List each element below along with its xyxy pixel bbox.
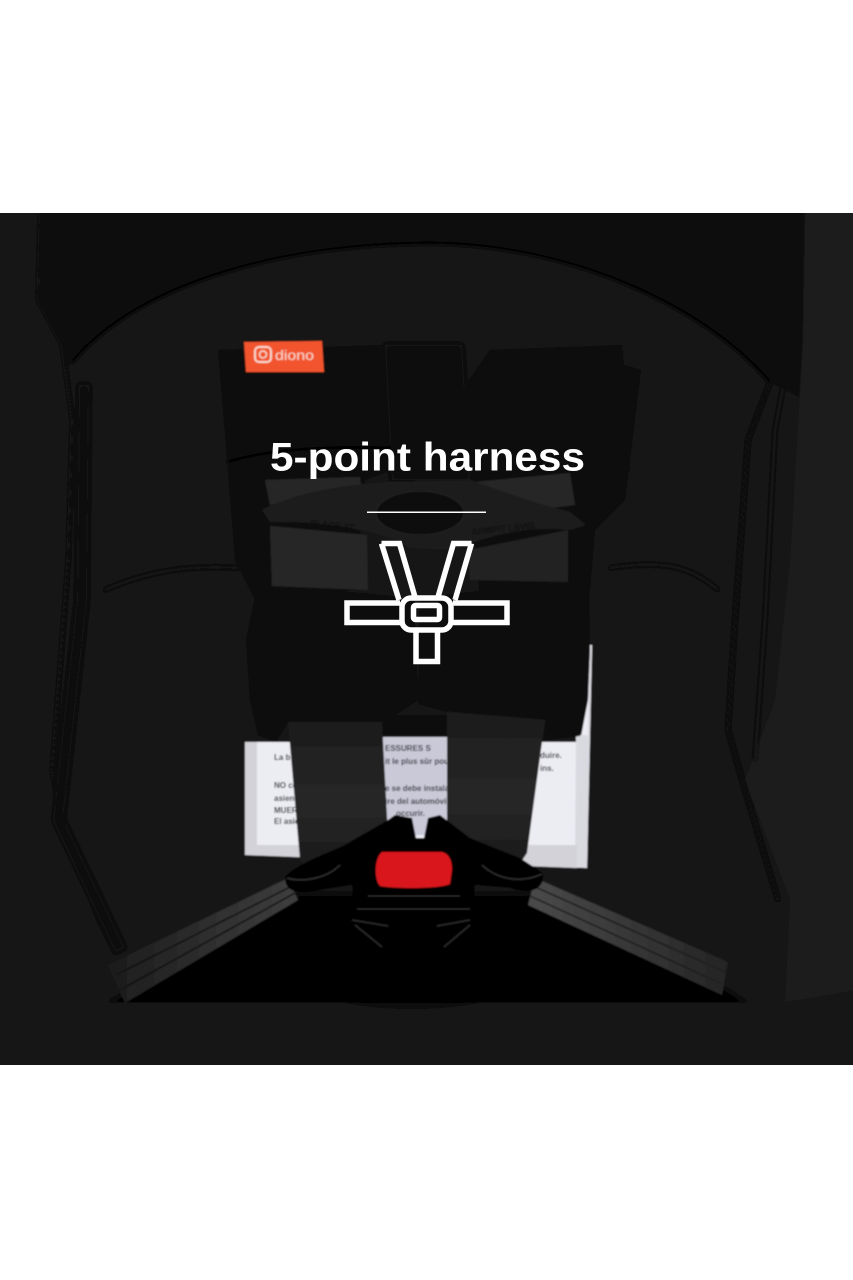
label fine print [274, 744, 562, 826]
label fine print: El asien [274, 817, 304, 826]
lower right pad [418, 582, 590, 740]
photo: stroller seat [0, 208, 853, 1070]
label fine print: occurir. [396, 809, 425, 818]
caption: 5-point harness: 5-point harness [270, 436, 585, 480]
left shoulder belt [288, 722, 388, 872]
label fine print: MUERT [274, 806, 303, 815]
icon: crotch strap [416, 632, 438, 662]
label fine print: ire del automóvil [385, 797, 449, 806]
icon: hip straps [347, 603, 507, 622]
chest clip webbing [265, 473, 575, 590]
infographic: seat harness photo with caption [0, 213, 853, 1065]
icon: right shoulder strap [438, 544, 472, 600]
label fine print: NO co [274, 781, 298, 790]
lower harness pads [246, 582, 590, 742]
label fine print: ins. [540, 764, 554, 773]
left hip belt [108, 878, 298, 1003]
red release button [376, 852, 452, 888]
buckle [285, 815, 543, 948]
centre fold between pads [385, 345, 470, 480]
footrest bar [108, 1002, 746, 1012]
seat base fabric [38, 220, 801, 1048]
chest clip: ARMPIT LEVEL [471, 520, 538, 537]
upper left shoulder pad [218, 345, 392, 600]
left side wing [35, 214, 128, 955]
centre shadow under the pads [380, 715, 450, 737]
right side wing [724, 213, 805, 902]
headrest area above the arc [40, 208, 805, 400]
crotch pad [346, 1002, 478, 1009]
icon: 5-point harness [347, 544, 507, 662]
label fine print: it le plus sûr pour [385, 757, 452, 766]
seat cushion creases [105, 564, 718, 590]
label fine print: La b [274, 753, 291, 762]
icon: left shoulder strap [382, 544, 415, 600]
label fine print: asien [274, 794, 295, 803]
brand tag: diono [275, 347, 314, 363]
right hip belt [528, 878, 728, 995]
lower left pad [246, 591, 418, 742]
label fine print: duire. [540, 751, 562, 760]
chest clip [262, 479, 586, 542]
right shoulder belt [447, 712, 545, 872]
warning label [245, 645, 592, 868]
caption rule [367, 512, 486, 513]
icon: buckle [402, 598, 451, 630]
upper right shoulder pad [462, 345, 641, 600]
label fine print: e se debe instala [385, 784, 450, 793]
brand tag [244, 341, 324, 372]
label fine print: ESSURES S [385, 744, 431, 753]
dark recess under the harness [110, 895, 745, 1003]
chest clip: PLACE AT [310, 518, 355, 533]
